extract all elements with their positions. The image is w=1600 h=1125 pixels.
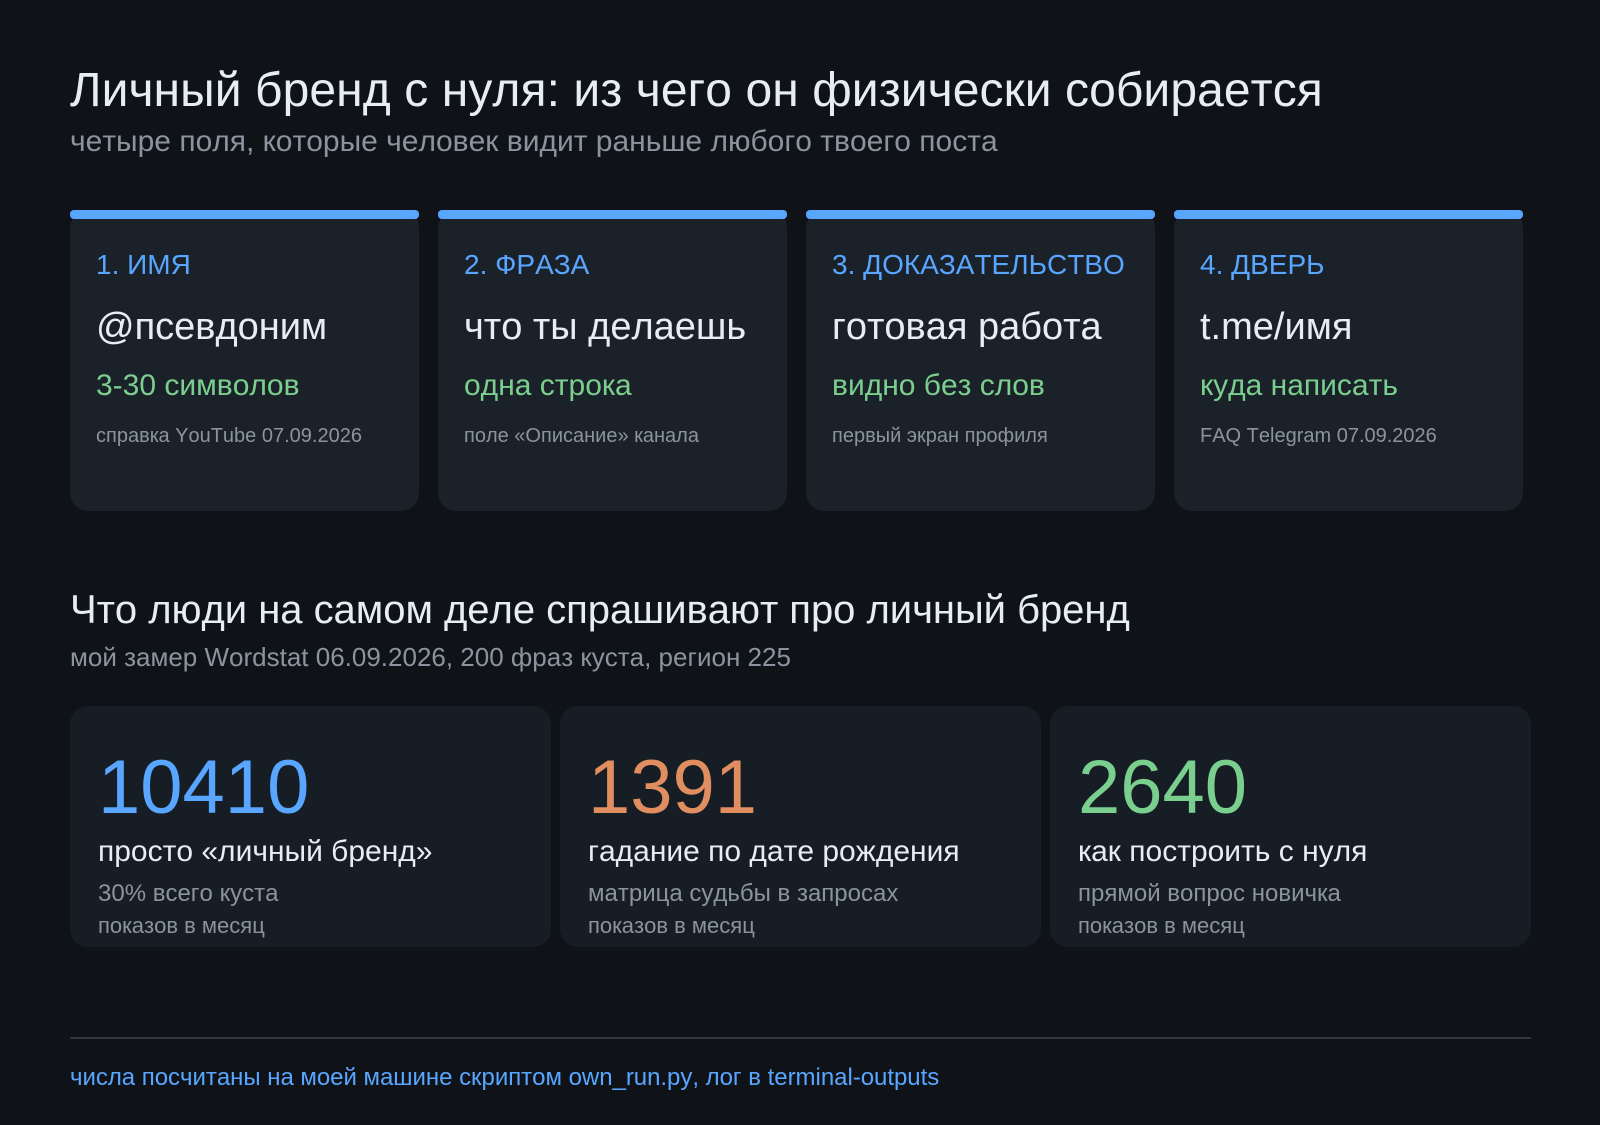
card 4 heading: 4. ДВЕРЬ xyxy=(1200,249,1324,280)
section heading: Что люди на самом деле спрашивают про личный бренд xyxy=(70,588,1130,632)
panel: card 3 proof xyxy=(806,210,1155,511)
card 4 source: FAQ Telegram 07.09.2026 xyxy=(1200,425,1437,447)
stat unit: показов в месяц xyxy=(1078,913,1245,938)
stat note: прямой вопрос новичка xyxy=(1078,880,1341,907)
card 4 detail: куда написать xyxy=(1200,369,1398,402)
stat label: как построить с нуля xyxy=(1078,835,1367,868)
panel: card 4 door xyxy=(1174,210,1523,511)
card 1 heading: 1. ИМЯ xyxy=(96,249,191,280)
card 4 value: t.me/имя xyxy=(1200,306,1352,348)
card 1 source: справка YouTube 07.09.2026 xyxy=(96,425,362,447)
card 2 value: что ты делаешь xyxy=(464,306,746,348)
panel: card 1 name xyxy=(70,210,419,511)
stat unit: показов в месяц xyxy=(588,913,755,938)
card 3 value: готовая работа xyxy=(832,306,1102,348)
panel: stat 10410 xyxy=(70,706,551,947)
stat unit: показов в месяц xyxy=(98,913,265,938)
card 3 detail: видно без слов xyxy=(832,369,1045,402)
card 3 source: первый экран профиля xyxy=(832,425,1048,447)
title: Личный бренд с нуля: из чего он физически собирается xyxy=(70,64,1323,117)
stat number: 2640 xyxy=(1078,745,1247,830)
stat number: 1391 xyxy=(588,745,757,830)
stat number: 10410 xyxy=(98,745,309,830)
subtitle: четыре поля, которые человек видит раньше любого твоего поста xyxy=(70,125,998,158)
panel: stat 2640 xyxy=(1050,706,1531,947)
footer note: числа посчитаны на моей машине скриптом own_run.py, лог в terminal-outputs xyxy=(70,1064,939,1091)
stat note: матрица судьбы в запросах xyxy=(588,880,898,907)
panel: card 2 phrase xyxy=(438,210,787,511)
card 2 detail: одна строка xyxy=(464,369,632,402)
card 1 value: @псевдоним xyxy=(96,306,327,348)
panel: stat 1391 xyxy=(560,706,1041,947)
stat label: просто «личный бренд» xyxy=(98,835,432,868)
card 3 heading: 3. ДОКАЗАТЕЛЬСТВО xyxy=(832,249,1125,280)
stat label: гадание по дате рождения xyxy=(588,835,960,868)
card 2 heading: 2. ФРАЗА xyxy=(464,249,589,280)
card 1 detail: 3-30 символов xyxy=(96,369,300,402)
section subtitle: мой замер Wordstat 06.09.2026, 200 фраз куста, регион 225 xyxy=(70,642,791,672)
stat note: 30% всего куста xyxy=(98,880,278,907)
card 2 source: поле «Описание» канала xyxy=(464,425,699,447)
